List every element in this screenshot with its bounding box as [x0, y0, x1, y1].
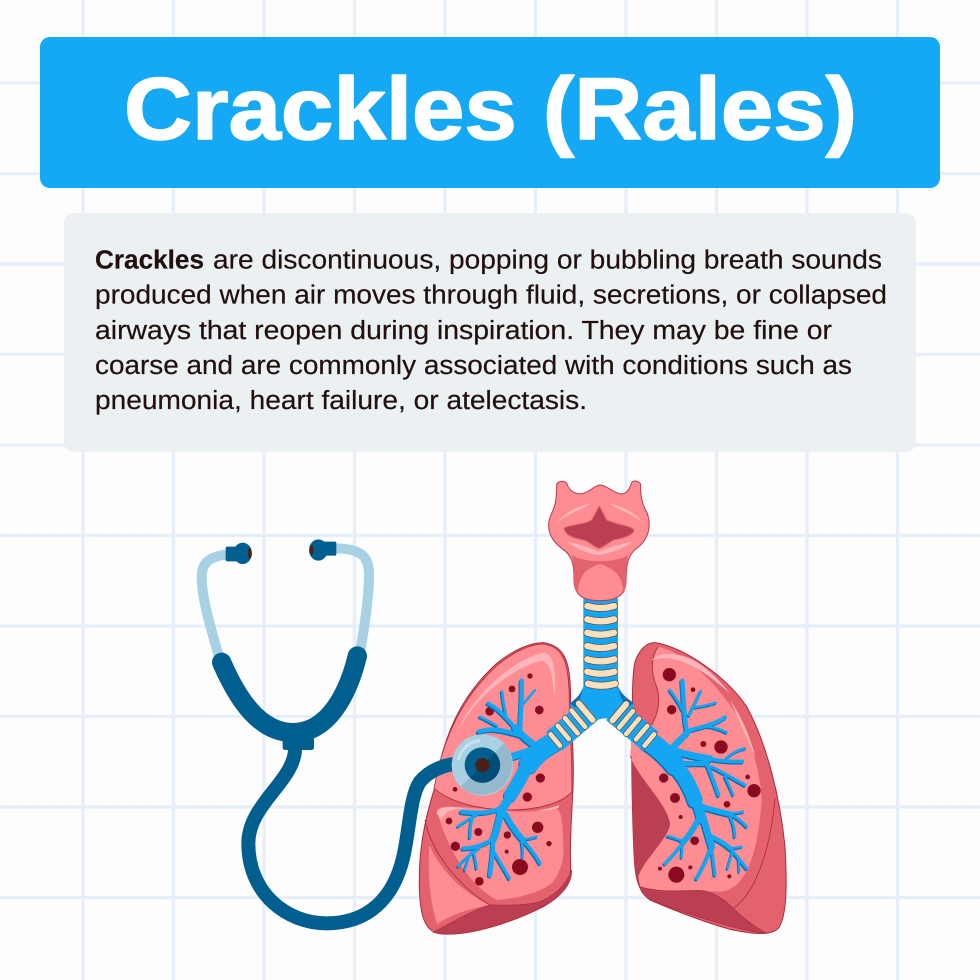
- definition text: pneumonia, heart failure, or atelectasis.: [95, 387, 587, 415]
- definition text: are discontinuous, popping or bubbling breath sounds: [213, 246, 882, 274]
- trachea: [547, 598, 658, 749]
- left lung: [419, 643, 573, 934]
- chestpiece: [452, 734, 513, 796]
- ear tube left: [202, 554, 228, 655]
- right lung: [630, 643, 786, 933]
- tracheal rings: [587, 606, 615, 686]
- earpiece left: [226, 543, 252, 564]
- lung lesions right: [658, 668, 761, 883]
- definition text: coarse and are commonly associated with conditions such as: [95, 352, 852, 380]
- connector: [283, 737, 314, 750]
- definition text: [95, 246, 887, 415]
- tube: [248, 747, 458, 923]
- title: Crackles (Rales): [124, 59, 857, 158]
- illustration: lungs and airway: [419, 481, 786, 934]
- title banner: [40, 37, 940, 188]
- panel: definition: [64, 213, 916, 452]
- lung lesions left: [446, 673, 552, 886]
- illustration: stethoscope: [202, 539, 513, 923]
- bronchial rings: [547, 699, 658, 749]
- larynx: [549, 481, 649, 601]
- bronchial tree: [457, 681, 747, 880]
- definition text: produced when air moves through fluid, secretions, or collapsed: [95, 282, 887, 310]
- definition text: Crackles: [95, 246, 204, 274]
- yoke: [222, 656, 357, 733]
- definition text: airways that reopen during inspiration. They may be fine or: [95, 317, 833, 345]
- earpiece right: [309, 539, 336, 561]
- ear tube right: [335, 548, 369, 652]
